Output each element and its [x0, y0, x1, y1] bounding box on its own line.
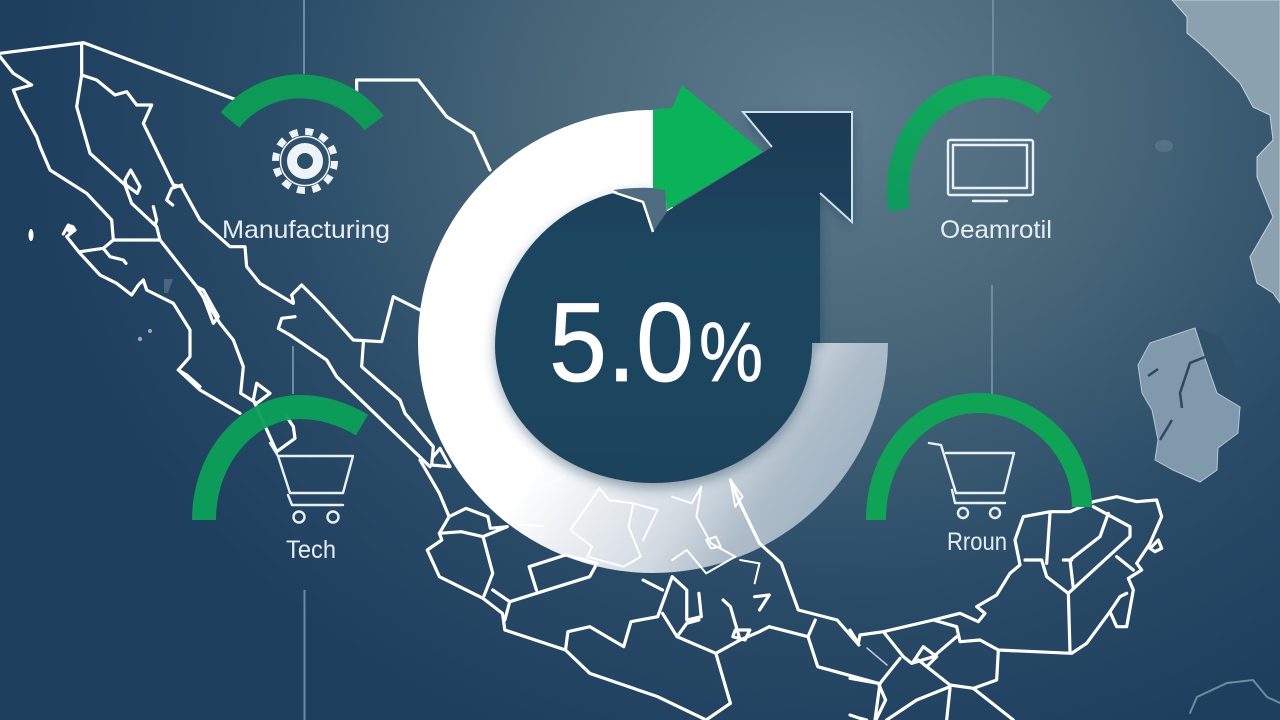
headline value: % — [699, 305, 763, 399]
arrow notch — [613, 188, 667, 232]
central dark badge — [495, 112, 852, 483]
map detail lines inside donut — [483, 437, 760, 583]
green arc: retail — [876, 403, 1082, 520]
icon: gear — [276, 132, 334, 190]
map outline: north-west — [0, 43, 490, 467]
label: manufacturing: Manufacturing — [222, 216, 390, 244]
vertical connector lines — [293, 0, 993, 720]
icon: monitor — [948, 140, 1033, 201]
label: tech: Tech — [286, 536, 336, 564]
donut ring — [418, 110, 888, 573]
arrow outline — [743, 112, 852, 222]
land mass: island — [1138, 328, 1240, 482]
headline value: 5.0 — [549, 280, 694, 405]
icon: cart, retail — [929, 443, 1014, 518]
icon: cart, tech — [270, 443, 353, 522]
green arc: tech — [204, 407, 362, 520]
map outline: south over donut — [420, 460, 886, 720]
map outline: Yucatan and south-east — [850, 497, 1162, 720]
small map islands — [28, 224, 173, 341]
green arrow — [653, 85, 763, 210]
land mass: top right — [1172, 0, 1280, 303]
faint spot — [1155, 140, 1173, 152]
thin map lines — [867, 648, 1280, 713]
label: retail: Rroun — [947, 528, 1007, 556]
green arc: manufacturing — [230, 86, 374, 123]
label: commercial: Oeamrotil — [940, 216, 1052, 244]
green arc: commercial — [898, 87, 1045, 210]
